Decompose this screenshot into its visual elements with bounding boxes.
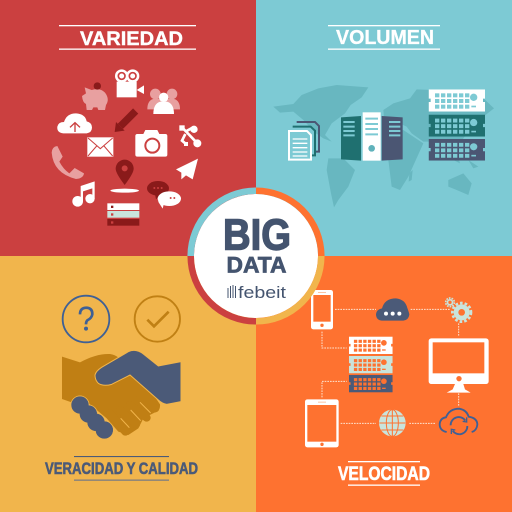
icon: music note xyxy=(72,181,95,207)
center badge: big data xyxy=(191,191,321,321)
icon: usb xyxy=(179,125,200,146)
icon: pencil xyxy=(115,111,136,132)
panel: veracidad y calidad background xyxy=(0,256,256,512)
icon: globe xyxy=(379,410,406,436)
icon: desktop monitor xyxy=(429,338,489,393)
icon group: veracidad y calidad xyxy=(62,296,181,439)
icon: gears xyxy=(446,298,471,322)
icon: group of people xyxy=(147,89,180,114)
icon: video camera xyxy=(115,69,144,97)
icon: paper plane xyxy=(176,159,198,179)
icon: binders xyxy=(341,112,403,161)
icon: cloud upload xyxy=(57,113,92,133)
heading: velocidad: VELOCIDAD xyxy=(338,464,430,485)
icon: chat bubbles xyxy=(147,181,181,209)
icon: question mark circle xyxy=(63,296,109,342)
illustration: volumen icons over world map xyxy=(273,85,494,207)
icon: location pin xyxy=(110,160,139,193)
icon: cloud sync xyxy=(440,409,477,434)
icon: document stack xyxy=(289,122,319,160)
icon: server racks xyxy=(429,89,485,161)
icon: envelope xyxy=(87,137,113,157)
icon: server racks xyxy=(349,337,393,392)
icon: tablet xyxy=(305,399,339,447)
title: big: BIG xyxy=(223,210,291,260)
title: data: DATA xyxy=(226,252,287,278)
logo: ifebeit: febeit xyxy=(238,283,286,302)
icon: phone xyxy=(52,146,84,179)
world map xyxy=(273,85,494,207)
icon: smartphone xyxy=(311,290,333,329)
heading: variedad: VARIEDAD xyxy=(80,28,183,50)
icon: server stack xyxy=(107,203,139,226)
panel: velocidad background xyxy=(256,256,512,512)
heading: volumen: VOLUMEN xyxy=(336,27,434,49)
icon: cloud with dots xyxy=(376,298,409,321)
heading: veracidad y calidad: VERACIDAD Y CALIDAD xyxy=(45,460,198,478)
icon: handshake xyxy=(62,350,181,439)
connector lines xyxy=(322,309,459,423)
icon: photo camera xyxy=(135,130,167,157)
panel: volumen background xyxy=(256,0,512,256)
icon group: variedad icons xyxy=(52,69,200,226)
heading: variedad xyxy=(59,25,196,50)
panel: variedad background xyxy=(0,0,256,256)
icon: piggy bank xyxy=(82,82,108,110)
illustration: velocidad network xyxy=(305,290,489,447)
icon: check circle xyxy=(135,296,180,342)
